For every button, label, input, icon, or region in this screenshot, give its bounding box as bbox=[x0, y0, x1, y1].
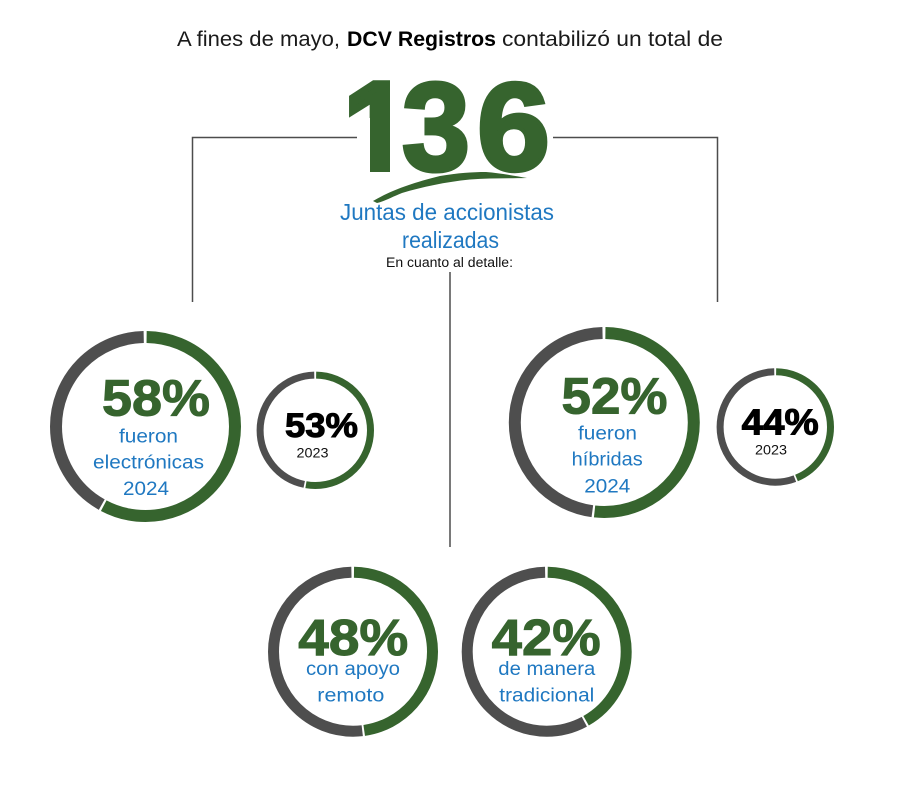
connector: left bbox=[192, 138, 357, 302]
title bbox=[177, 28, 723, 51]
big number 136 bbox=[349, 80, 548, 174]
big number 136: 1 bbox=[344, 58, 414, 197]
ring: 48% con apoyo remoto bbox=[274, 572, 432, 731]
ring: 53% 2023: 2023 bbox=[296, 444, 329, 460]
subtitle: Juntas de accionistas bbox=[340, 199, 554, 225]
subtitle: realizadas bbox=[402, 227, 499, 253]
title: DCV Registros bbox=[347, 28, 496, 51]
big number 136: 6 bbox=[477, 58, 550, 197]
brush stroke underline bbox=[373, 172, 527, 203]
ring: 53% 2023: 53% bbox=[285, 407, 358, 445]
ring: 42% de manera tradicional bbox=[467, 572, 626, 731]
ring: 44% 2023: 44% bbox=[742, 401, 819, 442]
ring: 52% híbridas 2024: híbridas bbox=[572, 450, 643, 471]
ring: 42% de manera tradicional: de manera bbox=[498, 659, 596, 680]
ring: 42% de manera tradicional: 42% bbox=[492, 609, 601, 666]
ring: 58% electrónicas 2024: electrónicas bbox=[93, 452, 204, 474]
ring: 58% electrónicas 2024: fueron bbox=[119, 426, 178, 448]
title: contabilizó un total de bbox=[502, 28, 723, 51]
ring: 42% de manera tradicional: tradicional bbox=[499, 686, 594, 707]
ring: 58% electrónicas 2024 bbox=[56, 337, 235, 516]
subtitle bbox=[340, 199, 554, 253]
ring: 44% 2023 bbox=[720, 372, 830, 482]
ring: 52% híbridas 2024: 52% bbox=[562, 367, 668, 424]
connector: right bbox=[553, 138, 718, 302]
ring: 48% con apoyo remoto: con apoyo bbox=[306, 659, 400, 680]
ring: 58% electrónicas 2024: 2024 bbox=[123, 479, 169, 500]
ring: 48% con apoyo remoto: remoto bbox=[317, 686, 384, 707]
ring: 52% híbridas 2024: fueron bbox=[578, 423, 637, 444]
ring: 58% electrónicas 2024: 58% bbox=[102, 370, 210, 426]
detail caption: En cuanto al detalle: bbox=[386, 255, 513, 270]
connector: centre bbox=[449, 272, 451, 547]
ring: 44% 2023: 2023 bbox=[755, 441, 787, 457]
ring: 52% híbridas 2024: 2024 bbox=[584, 476, 631, 497]
title: A fines de mayo, bbox=[177, 28, 340, 51]
ring: 53% 2023 bbox=[260, 375, 370, 486]
ring: 48% con apoyo remoto: 48% bbox=[298, 609, 408, 666]
ring: 52% híbridas 2024 bbox=[515, 333, 694, 512]
big number 136: 3 bbox=[402, 58, 470, 197]
